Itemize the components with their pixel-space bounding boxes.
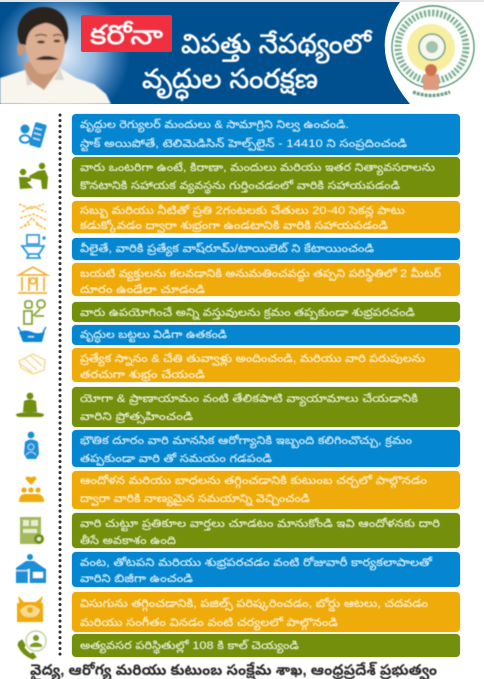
tip 3: hand washing: సబ్బు మరియు నీటితో ప్రతి 2గంటలకు చేతులు 20-40 సెకన్ల పాటు [80,204,405,219]
tip 3: hand washing [72,201,460,233]
emblem of Andhra Pradesh [392,6,474,96]
tip 10: mental health time [72,430,460,467]
tip 1: medicines stock [72,114,460,155]
tip 13: daily activities: వంట, తోటపని మరియు శుభ్రపరచడం వంటి రోజువారీ కార్యకలాపాలతో [80,556,433,571]
tip 10: mental health time: తప్పకుండా వారి తో సమయం గడపండి [80,452,272,466]
tip 15: emergency call 108 [72,634,460,657]
tip 6: clean objects: వారు ఉపయోగించే అన్ని వస్తువులను క్రమం తప్పకుండా శుభ్రపరచండి [80,306,415,320]
icon: helping a person [19,163,48,189]
tip 12: avoid negative news: తీసే అవకాశం ఉంది [80,534,176,547]
tip 5: visitors and distance: దూరం ఉండేలా చూడండి [80,283,205,296]
icon: wash basin [18,327,46,342]
title badge: corona: కరోనా [90,20,163,50]
icon: medicine strip and pills [20,122,47,148]
tip 5: visitors and distance [72,263,460,296]
tip 9: yoga: యోగా & ప్రాణాయామం వంటి తేలికపాటి వ్యాయామాలు చేయడానికి [80,392,418,407]
tip 13: daily activities [72,552,460,587]
tip 7: wash clothes separately [72,325,460,345]
tip 8: towels and bedding: ప్రత్యేక స్నానం & చేతి తువ్వాళ్లు అందించండి, మరియు వారి పరుపులను [80,352,425,367]
tip 12: avoid negative news [72,513,460,548]
tip 10: mental health time: భౌతిక దూరం వారి మానసిక ఆరోగ్యానికి ఇబ్బంది కలిగించొచ్చు, క్రమం [80,434,412,449]
tip 1: medicines stock: స్టాక్ అయిపోతే, టెలిమెడిసిన్ హెల్ప్‌లైన్ - 14410 ని సంప్రదించండి [80,137,407,152]
tip 14: beat boredom: మరియు సంగీతం వినడం వంటి చర్యలలో పాల్గొనండి [80,616,338,631]
tip 12: avoid negative news: వారి చుట్టూ ప్రతికూల వార్తలు చూడటం మానుకోండి ఇవి ఆందోళనకు దారి [80,517,441,532]
icon: towels [19,354,45,374]
tip 7: wash clothes separately: వృద్ధుల బట్టలు విడిగా ఉతకండి [80,329,227,344]
icon: family with heart [19,477,44,502]
tip 4: separate washroom: వీలైతే, వారికి ప్రత్యేక వాష్‌రూమ్/టాయిలెట్ ని కేటాయించండి [80,242,374,257]
tip 3: hand washing: కడుక్కోవడం ద్వారా శుభ్రంగా ఉండటానికి వారికి సహాయపడండి [80,219,388,233]
icon: puzzles and games [17,596,43,622]
footer: department credit: వైద్య, ఆరోగ్య మరియు కుటుంబ సంక్షేమ శాఖ, ఆంధ్రప్రదేశ్ ప్రభుత్వం [30,661,437,679]
dotted divider [58,115,62,657]
tip 2: essentials support: వారు ఒంటరిగా ఉంటే, కిరాణా, మందులు మరియు ఇతర నిత్యావసరాలను [80,161,435,176]
tip 9: yoga: వారిని ప్రోత్సహించండి [80,411,193,424]
tip 11: family discussions: ఆందోళన మరియు బాధలను తగ్గించడానికి కుటుంబ చర్చలో పాల్గొనడం [80,474,427,489]
icon: emergency phone [18,631,46,659]
tip 8: towels and bedding: తరచుగా శుభ్రం చేయండి [80,368,205,382]
tip 2: essentials support [72,157,460,197]
tip 14: beat boredom: విసుగును తగ్గించడానికి, పజిల్స్ పరిష్కరించడం, బోర్డు ఆటలు, చదవడం [80,597,428,612]
icon: cleaning [24,300,45,324]
tip 5: visitors and distance: బయటి వ్యక్తులను కలవడానికి అనుమతించవద్దు తప్పని పరిస్థితిలో 2 మీటర్ [80,267,442,283]
icon: news on a device [20,517,44,544]
icon: washroom [22,235,45,258]
tip 4: separate washroom [72,238,460,260]
title line 2: వృద్ధుల సంరక్షణ [142,64,318,101]
title badge: corona [81,15,172,52]
icon: person with mind [24,432,39,459]
icon: yoga pose [16,393,44,417]
tip 11: family discussions [72,471,460,509]
icon: hand washing [19,204,46,229]
icon: house with people [18,267,47,293]
tip 15: emergency call 108: అత్యవసర పరిస్థితుల్లో 108 కి కాల్ చెయ్యండి [80,639,299,655]
tip 11: family discussions: ద్వారా వారికి నాణ్యమైన సమయాన్ని వెచ్చించండి [80,493,310,507]
tip 6: clean objects [72,302,460,322]
tip 8: towels and bedding [72,348,460,382]
tip 14: beat boredom [72,592,460,632]
header banner [0,2,474,104]
icon: home activities [16,554,46,583]
portrait of the chief minister [0,7,111,104]
tip 9: yoga [72,387,460,427]
title line 1: విపత్తు నేపథ్యంలో [181,29,373,64]
tip 13: daily activities: వారిని బిజీగా ఉంచండి [80,573,193,585]
tip 2: essentials support: కొనటానికి సహాయక వ్యవస్థను గుర్తించడంలో వారికి సహాయపడండి [80,179,400,195]
tip 1: medicines stock: వృద్ధుల రెగ్యులర్ మందులు & సామాగ్రిని నిల్వ ఉంచండి. [80,118,349,134]
